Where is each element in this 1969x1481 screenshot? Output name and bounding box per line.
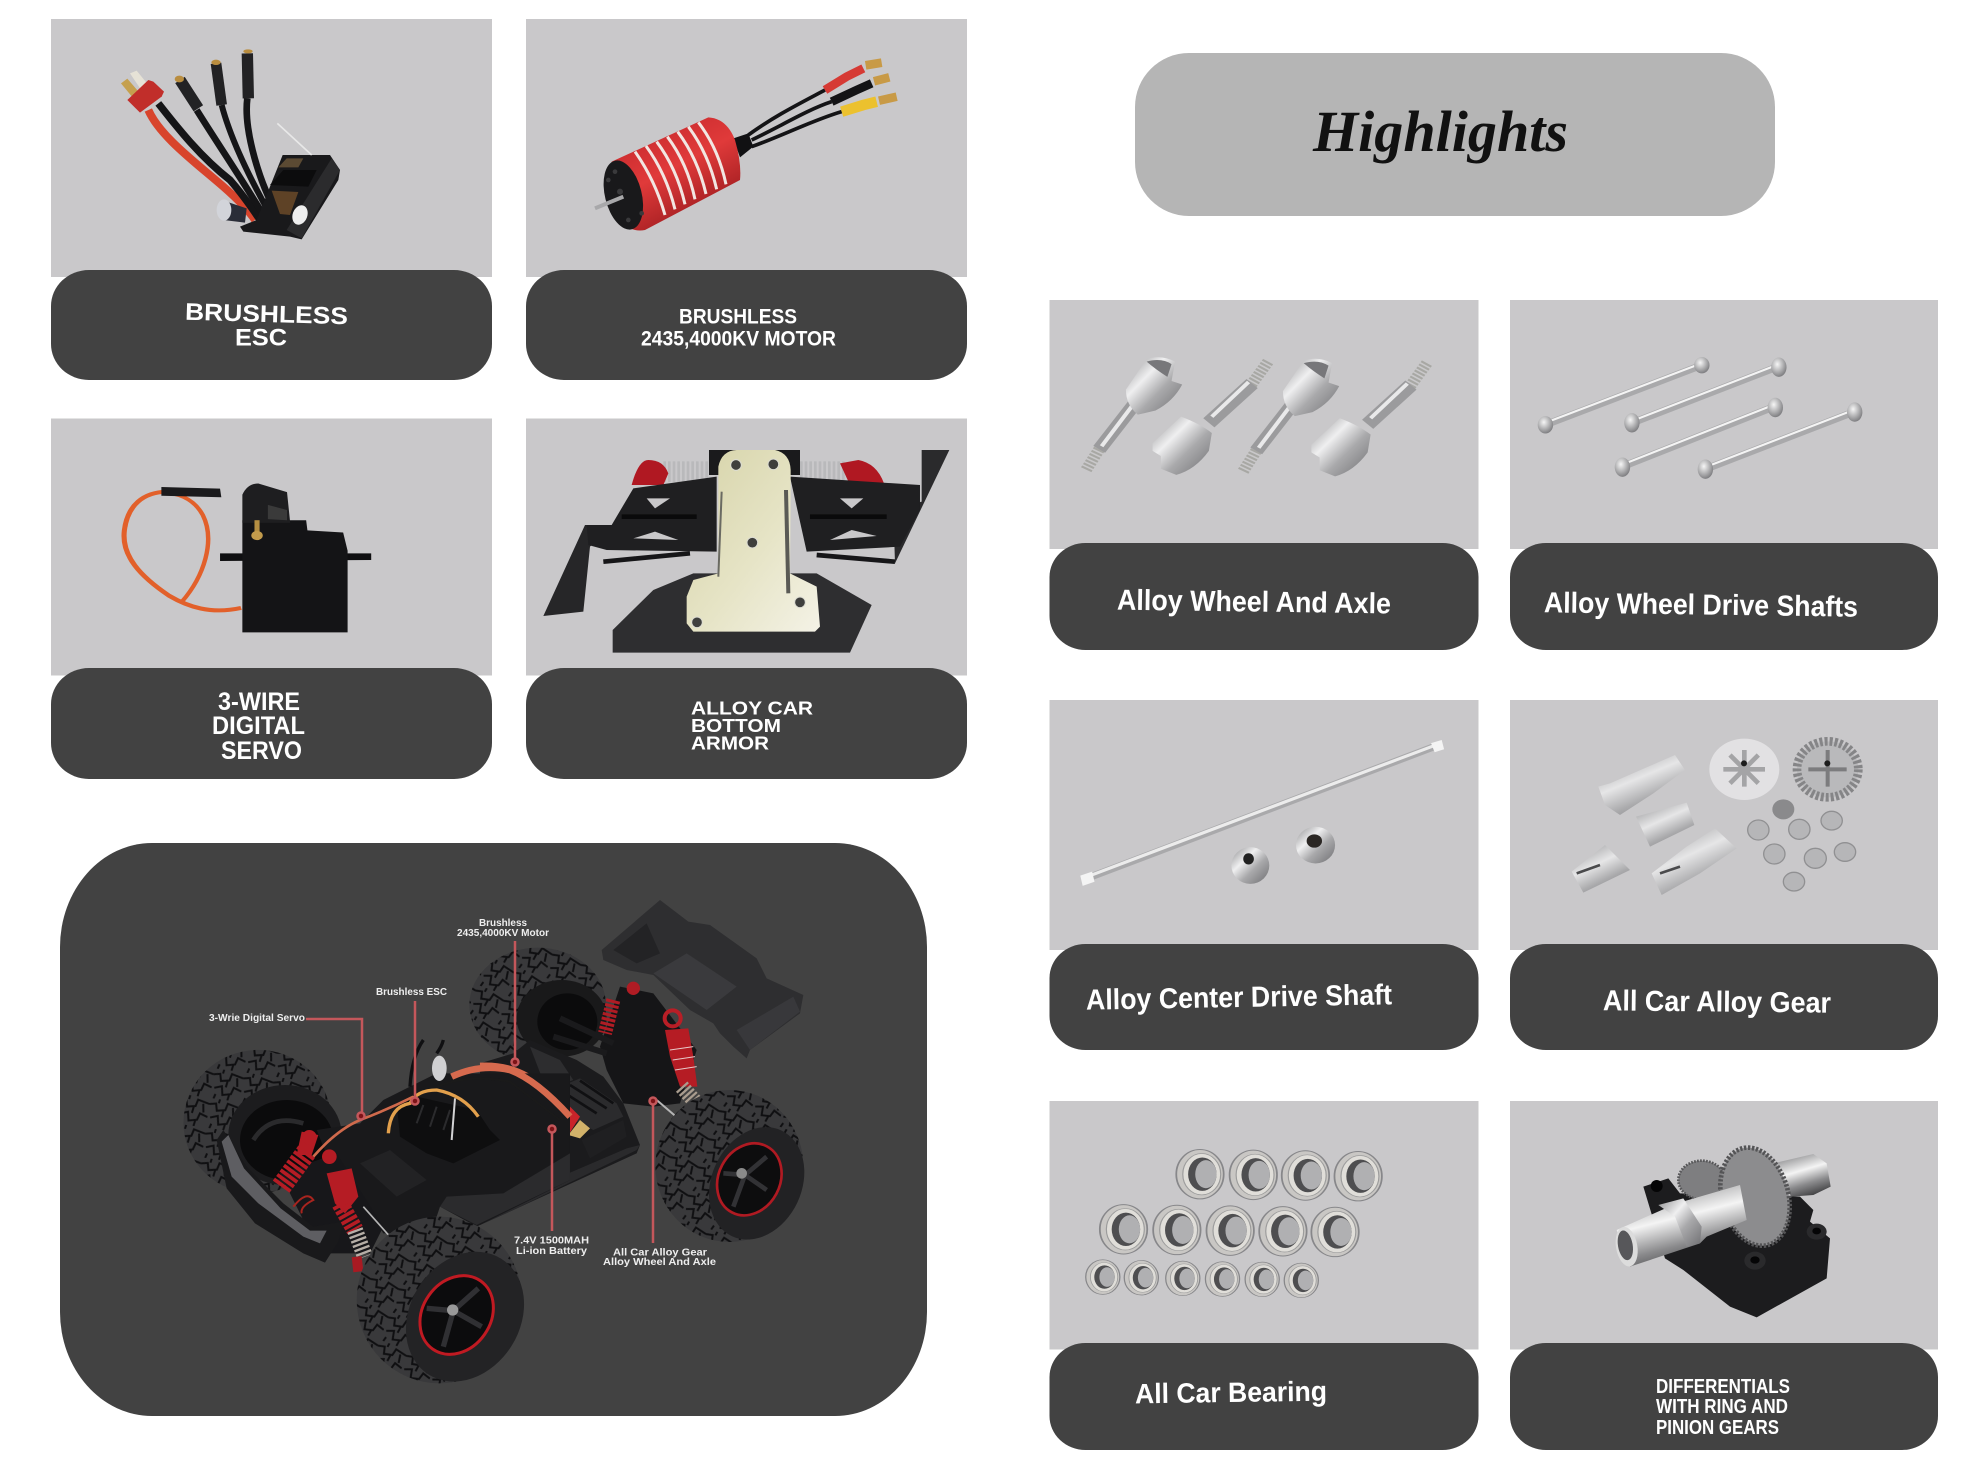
front left wheel	[170, 1036, 345, 1207]
caption text: Alloy Wheel Drive Shafts	[1544, 587, 1858, 624]
caption text	[185, 299, 348, 352]
icon: bearings	[1086, 1149, 1382, 1298]
caption text: DIFFERENTIALS	[1656, 1376, 1790, 1398]
icon: 3-wire servo	[124, 483, 371, 632]
panel: bottom armor	[526, 418, 967, 779]
rear wires and connector	[480, 1065, 590, 1138]
caption text: Alloy Center Drive Shaft	[1086, 979, 1393, 1017]
panel: car diagram	[60, 843, 927, 1416]
panel: brushless motor	[526, 19, 967, 380]
callout labels: Brushless ESC	[376, 987, 447, 998]
panel: brushless ESC	[51, 19, 492, 380]
callout lines	[306, 941, 656, 1243]
caption pill	[1050, 1343, 1478, 1450]
caption text: SERVO	[221, 737, 302, 765]
caption text: 2435,4000KV MOTOR	[641, 328, 836, 350]
rear suspension	[553, 982, 697, 1120]
caption text	[1656, 1376, 1790, 1439]
caption text: 3-WIRE	[218, 688, 300, 716]
caption pill	[1050, 543, 1478, 650]
rear wing	[602, 900, 803, 1058]
panel: alloy center drive shaft	[1050, 700, 1478, 1050]
front shocks	[280, 1130, 365, 1272]
panel: digital servo	[51, 418, 492, 779]
callout labels: 3-Wrie Digital Servo	[209, 1013, 305, 1024]
caption pill	[526, 668, 967, 779]
caption text	[641, 306, 836, 350]
wires	[293, 1068, 570, 1213]
caption pill	[1510, 543, 1938, 650]
panel: all car alloy gear	[1510, 700, 1938, 1050]
panel: alloy wheel drive shafts	[1510, 300, 1938, 650]
panel: differentials	[1510, 1101, 1938, 1450]
caption text: PINION GEARS	[1656, 1417, 1779, 1439]
icon: alloy bottom armor on chassis	[543, 450, 949, 653]
caption text: WITH RING AND	[1656, 1396, 1788, 1418]
caption text: All Car Alloy Gear	[1603, 985, 1831, 1020]
icon: center shaft and gears	[1080, 740, 1444, 886]
callout labels: Alloy Wheel And Axle	[603, 1257, 716, 1268]
icon: axles	[1086, 357, 1427, 476]
caption pill	[1510, 944, 1938, 1050]
caption text	[691, 698, 813, 754]
caption pill	[1050, 944, 1478, 1050]
caption text: ESC	[235, 324, 287, 352]
caption pill	[51, 270, 492, 380]
chassis tub	[480, 1040, 640, 1225]
caption pill	[526, 270, 967, 380]
callout labels: Li-ion Battery	[516, 1246, 587, 1257]
caption text: ALLOY CAR	[691, 698, 813, 718]
ESC block	[397, 1040, 500, 1163]
caption text: BRUSHLESS	[679, 306, 797, 328]
callout labels: Brushless	[479, 918, 527, 929]
callout labels: All Car Alloy Gear	[613, 1248, 707, 1258]
caption text	[212, 688, 305, 765]
callout labels: 2435,4000KV Motor	[457, 928, 549, 939]
caption text: ARMOR	[691, 732, 769, 754]
car rear section	[469, 900, 822, 1255]
caption text: All Car Bearing	[1135, 1376, 1327, 1409]
caption pill	[1510, 1343, 1938, 1450]
panel: all car bearing	[1050, 1101, 1478, 1450]
icon: brushless ESC with wires	[121, 49, 340, 239]
caption text: BOTTOM	[691, 715, 781, 736]
callout labels	[209, 918, 716, 1268]
front bumper	[217, 1130, 343, 1263]
caption pill	[51, 668, 492, 779]
icon: alloy gear set	[1572, 739, 1858, 895]
caption text: BRUSHLESS	[185, 299, 348, 330]
front wheel	[357, 1217, 548, 1404]
callout labels: 7.4V 1500MAH	[514, 1236, 589, 1246]
icon: drive shafts	[1538, 357, 1862, 479]
caption text: DIGITAL	[212, 712, 305, 740]
car front section	[170, 1036, 570, 1404]
heading: Highlights	[1135, 53, 1775, 216]
icon: differential	[1613, 1140, 1831, 1317]
heading: Highlights: Highlights	[1312, 99, 1568, 164]
chassis	[280, 1073, 570, 1253]
icon: brushless motor	[595, 63, 897, 234]
rear left wheel	[469, 948, 607, 1062]
right wheel	[655, 1090, 822, 1255]
caption text: Alloy Wheel And Axle	[1117, 585, 1391, 620]
panel: alloy wheel and axle	[1050, 300, 1478, 650]
